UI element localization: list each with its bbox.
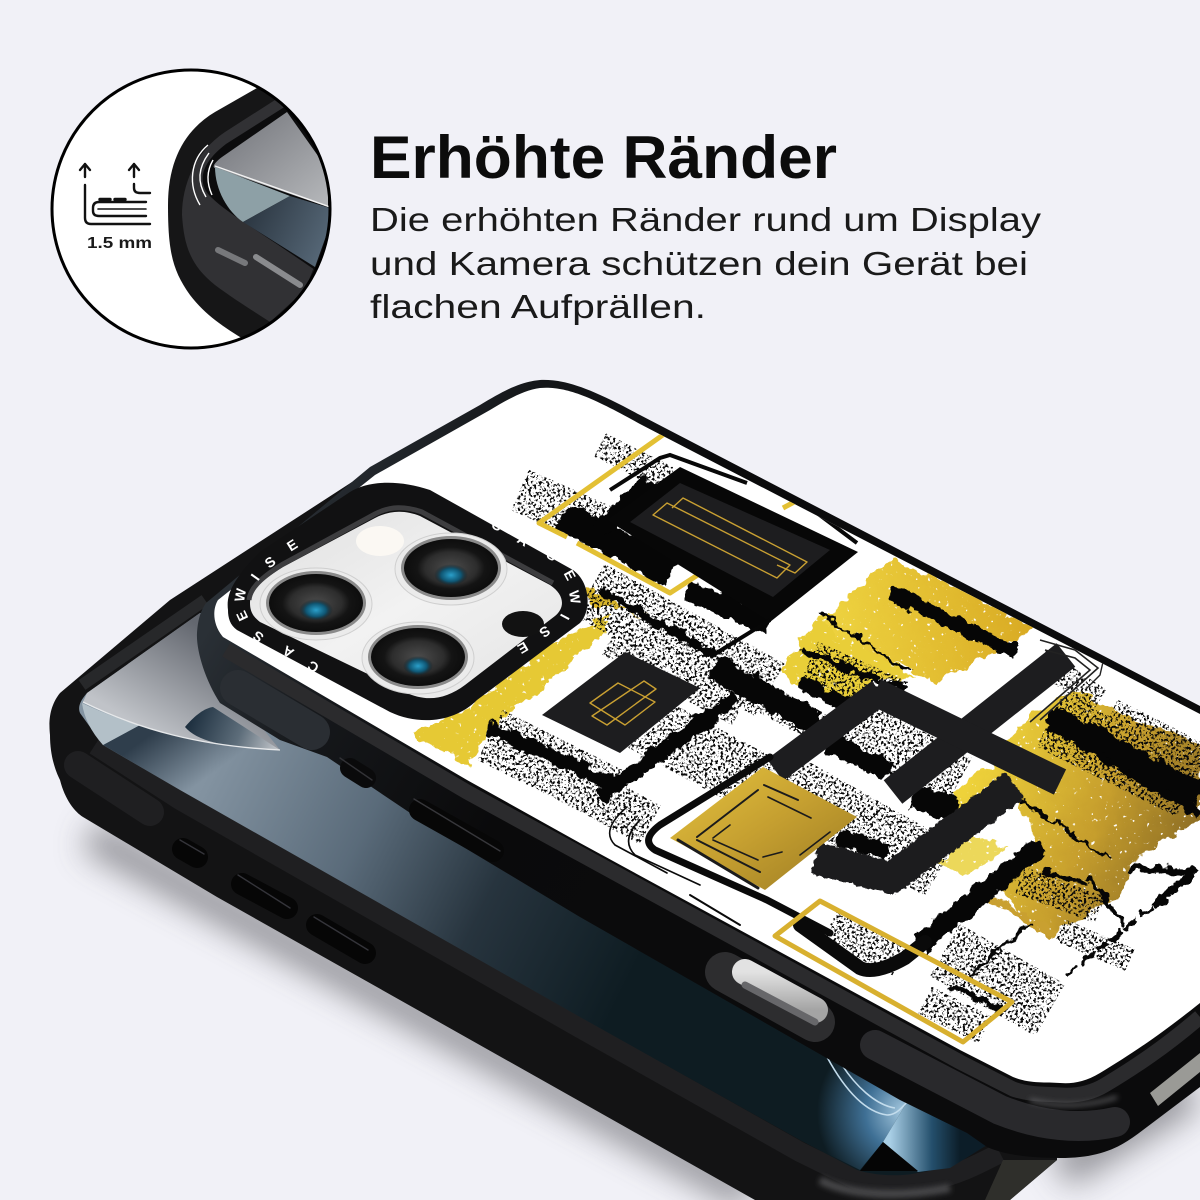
label: 1.5 mm: 1.5 mm bbox=[87, 235, 152, 252]
dark L bar lower right bbox=[815, 785, 1015, 878]
carbon bump left bbox=[238, 688, 312, 732]
screen dark overlay under slate bbox=[103, 725, 320, 790]
back phone corner bump bbox=[78, 765, 150, 812]
CASEWISE ring lettering: S bbox=[261, 553, 279, 571]
screen reflection light left bbox=[82, 703, 140, 745]
screen reflection grey upper bbox=[83, 613, 280, 750]
thin swirl lines around cross bbox=[1030, 640, 1103, 722]
gold brush patches bbox=[410, 558, 1200, 937]
CASEWISE ring lettering: A bbox=[515, 531, 531, 549]
CASEWISE ring lettering: C bbox=[489, 516, 505, 534]
lens left bbox=[260, 568, 372, 640]
screen blue highlights bottom-right bbox=[800, 1040, 987, 1172]
gold line rectangles inside top square bbox=[653, 498, 807, 578]
inset circle outline bbox=[52, 70, 330, 348]
case back white surface bbox=[214, 388, 1200, 1083]
dark cross bars bbox=[775, 655, 1066, 792]
flash bbox=[356, 526, 404, 556]
CASEWISE ring lettering: E bbox=[233, 608, 251, 624]
screen navy swoosh bbox=[185, 707, 280, 750]
description text: flachen Aufprällen. bbox=[370, 289, 706, 326]
black brush strokes bbox=[487, 480, 1200, 1010]
gold outline frame top-left bbox=[539, 432, 798, 593]
thin line above top square bbox=[610, 455, 857, 543]
front phone case bbox=[197, 380, 1200, 1158]
CASEWISE ring lettering: S bbox=[544, 546, 560, 564]
dark square top bbox=[630, 483, 830, 597]
fine grit texture bbox=[490, 445, 1200, 1030]
CASEWISE ring lettering: S bbox=[250, 628, 266, 646]
bump glass window bbox=[250, 512, 562, 698]
bump outer ring bbox=[228, 483, 588, 720]
back phone side buttons bbox=[180, 840, 368, 953]
gold logo lines inside middle square bbox=[590, 681, 656, 725]
CASEWISE ring lettering: W bbox=[231, 586, 249, 603]
carbon bump right bbox=[875, 1045, 1115, 1126]
CASEWISE ring lettering: A bbox=[279, 642, 297, 661]
description text: Die erhöhten Ränder rund um Display bbox=[370, 202, 1041, 239]
black frame stroke lower bbox=[610, 757, 925, 970]
back phone corner edge piece bbox=[985, 1160, 1057, 1200]
side button bbox=[414, 799, 500, 851]
icon: raised edge diagram bbox=[80, 164, 150, 224]
drop shadow under phones bbox=[90, 835, 1190, 1195]
inner ring bevel bbox=[249, 508, 553, 600]
rail highlight bottom bbox=[1030, 1097, 1117, 1105]
CASEWISE ring lettering: W bbox=[566, 589, 584, 606]
lens bottom bbox=[362, 622, 474, 694]
top square black border bbox=[607, 467, 858, 622]
inset close-up of case corner bbox=[168, 88, 328, 338]
gold square bbox=[670, 767, 857, 890]
case body bbox=[197, 380, 1200, 1158]
CASEWISE ring lettering: I bbox=[557, 612, 573, 622]
back phone case frame bbox=[49, 482, 1057, 1200]
heading: Erhöhte Ränder bbox=[370, 124, 837, 191]
CASEWISE ring lettering: E bbox=[561, 567, 579, 583]
back phone screen bbox=[79, 613, 1000, 1175]
CASEWISE ring lettering: E bbox=[515, 639, 531, 657]
CASEWISE ring lettering: C bbox=[304, 657, 322, 676]
lines inside gold square bbox=[678, 785, 830, 888]
abstract artwork bbox=[410, 432, 1200, 1042]
diagonal tail from top square bbox=[710, 620, 770, 657]
description text bbox=[370, 202, 1041, 326]
back phone rail bbox=[95, 745, 1000, 1184]
USB-C port bbox=[725, 972, 815, 1022]
end cut highlight right bbox=[1150, 1053, 1200, 1106]
CASEWISE ring lettering bbox=[231, 516, 584, 676]
description text: und Kamera schützen dein Gerät bei bbox=[370, 246, 1028, 283]
back phone bbox=[49, 482, 1057, 1200]
CASEWISE ring lettering: S bbox=[537, 623, 553, 641]
microphone hole bbox=[502, 611, 544, 637]
camera bump bbox=[228, 483, 588, 720]
gold outline frame bottom bbox=[775, 901, 1012, 1042]
CASEWISE ring lettering: E bbox=[284, 536, 300, 554]
back phone bottom rail highlight bbox=[820, 1180, 950, 1194]
rail along screen edge bbox=[226, 650, 1200, 1095]
lens right bbox=[395, 533, 507, 605]
circular detail inset: raised edge bbox=[52, 70, 340, 348]
swoosh line bbox=[83, 702, 280, 750]
back phone top rail bbox=[82, 600, 205, 685]
CASEWISE ring lettering: I bbox=[247, 571, 263, 583]
side mute switch bbox=[340, 758, 372, 780]
dark square middle bbox=[542, 652, 700, 753]
